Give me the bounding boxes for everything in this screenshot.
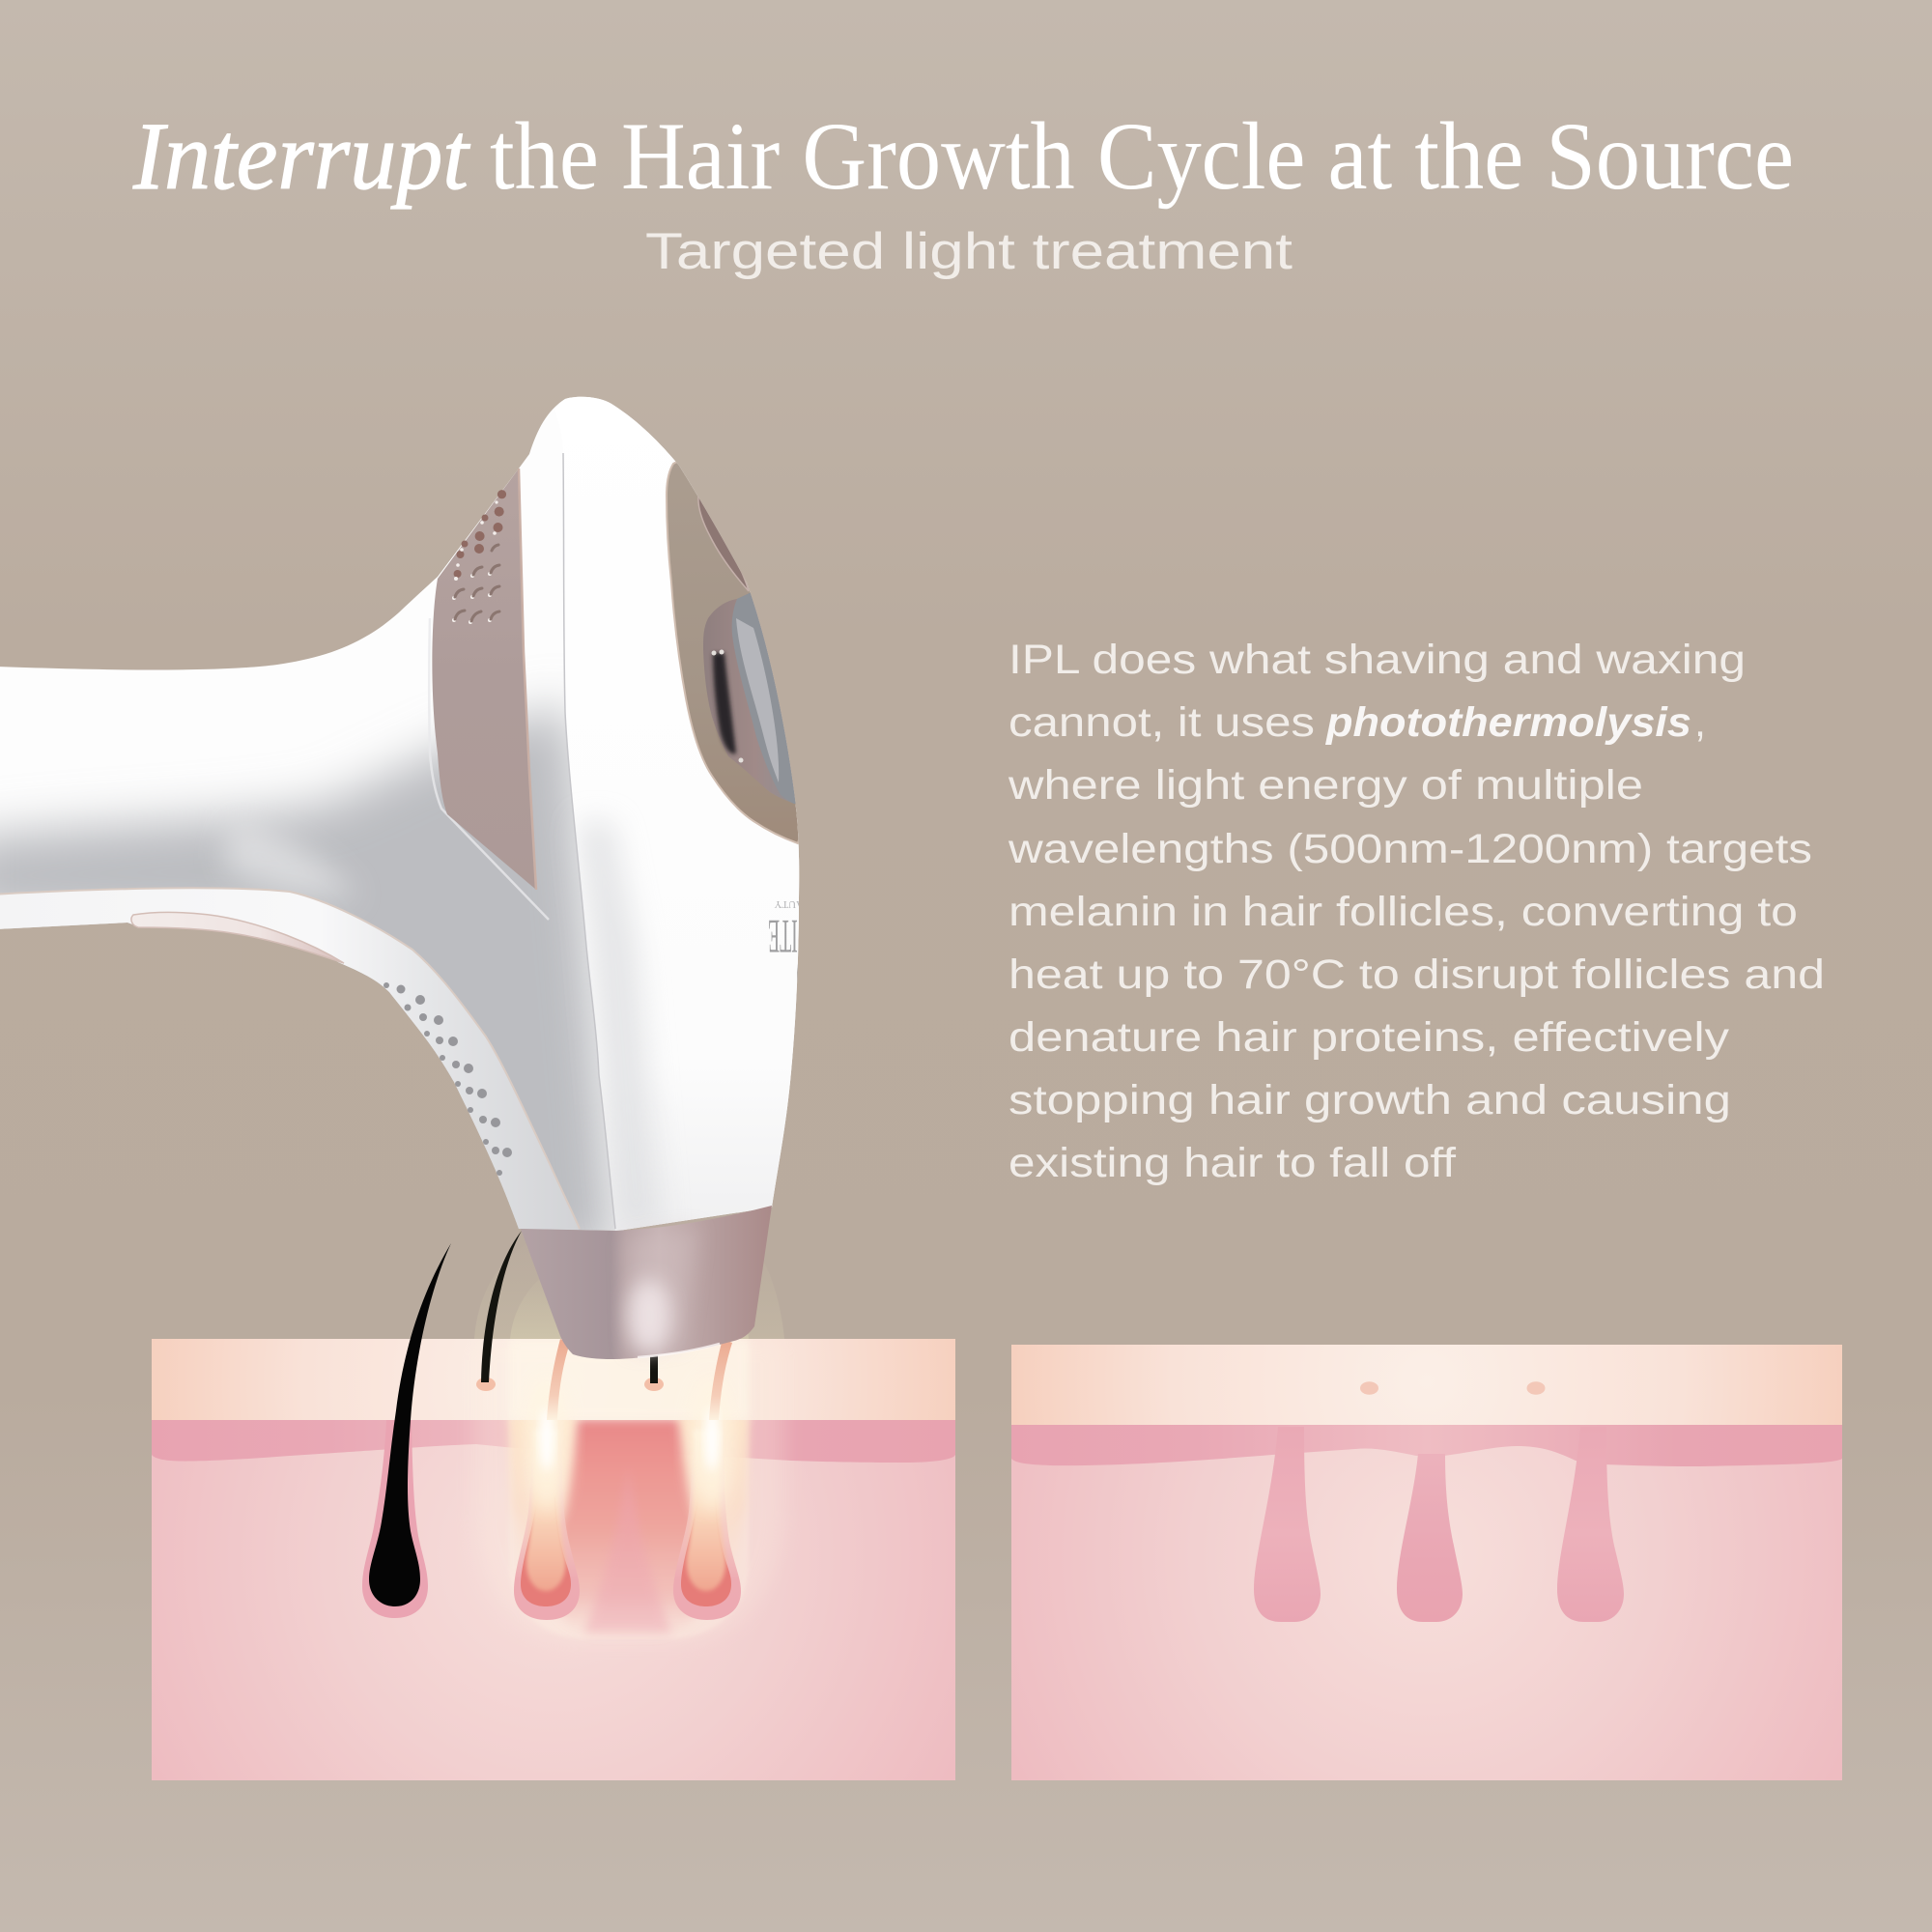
- logo text: O: [796, 948, 806, 1008]
- follicle: untreated: [362, 1420, 428, 1618]
- light glow in skin: [473, 1339, 784, 1642]
- title: the Hair Growth Cycle at the Source: [490, 102, 1794, 210]
- dark strip: [713, 653, 736, 753]
- emphasised term: photothermolysis: [1325, 699, 1691, 746]
- bulb: right heated: [681, 1430, 731, 1606]
- body text: IPL explanation: IPL does what shaving and waxing: [1009, 637, 1746, 683]
- lens crescent: [698, 496, 749, 591]
- dermis band: [1011, 1425, 1842, 1466]
- flank glow right: [680, 1420, 752, 1536]
- seam lines: [0, 888, 580, 1229]
- hair: long black: [369, 1243, 451, 1606]
- follicle 3: [1557, 1427, 1624, 1622]
- pore dots: [476, 1378, 664, 1391]
- trigger button: [131, 912, 344, 963]
- body text: IPL explanation: melanin in hair follicles, converting to: [1009, 889, 1798, 935]
- rose-gold collar: [521, 1206, 772, 1359]
- hair shaft: heated left: [547, 1339, 570, 1420]
- body text: IPL explanation: wavelengths (500nm-1200nm) targets: [1008, 826, 1812, 872]
- flank glow left: [507, 1420, 574, 1538]
- title: Interrupt: [132, 102, 470, 210]
- body text: IPL explanation: where light energy of multiple: [1008, 762, 1643, 809]
- follicle: treated left: [514, 1420, 580, 1620]
- body text: IPL explanation: denature hair proteins, effectively: [1009, 1014, 1730, 1061]
- device: IPL handset: [0, 386, 821, 1359]
- light glow above skin: [474, 1236, 784, 1339]
- subtitle: Targeted light treatment: [645, 223, 1293, 280]
- glass grey face: [732, 593, 796, 804]
- logo text: AUTY: [774, 898, 804, 910]
- hair: short left: [481, 1231, 522, 1382]
- body text: IPL explanation: [1008, 637, 1825, 1186]
- panel: skin during treatment: [152, 1243, 955, 1780]
- body shading: [0, 705, 618, 1256]
- hair shaft: heated right: [709, 1339, 732, 1420]
- body text: IPL explanation: existing hair to fall off: [1009, 1140, 1457, 1186]
- bulb: left heated: [521, 1430, 571, 1606]
- hot spots: [523, 1412, 736, 1513]
- follicle: treated right: [673, 1420, 741, 1620]
- glass: [703, 593, 796, 804]
- front face shading near ridge: [578, 821, 662, 1231]
- follicle 2: [1397, 1454, 1463, 1622]
- lower vent dots: [384, 982, 512, 1176]
- dermis band: [152, 1420, 955, 1463]
- panel: skin after treatment: [1011, 1345, 1842, 1780]
- lower strip below seam: [0, 888, 580, 1236]
- hair: short centre: [650, 1343, 658, 1383]
- window bezel: [667, 454, 807, 843]
- neck lightening near seam: [222, 821, 357, 898]
- logo text: ELITE: [768, 909, 821, 962]
- follicle 1: [1254, 1427, 1321, 1622]
- logo text: [769, 901, 799, 982]
- front face: [554, 386, 802, 1231]
- top vent panel: [432, 469, 536, 890]
- body text: IPL explanation: ,: [1694, 699, 1706, 746]
- body text: IPL explanation: heat up to 70°C to disrupt follicles and: [1009, 952, 1825, 998]
- body text: IPL explanation: stopping hair growth and causing: [1009, 1077, 1731, 1123]
- body text: IPL explanation: cannot, it uses: [1009, 699, 1315, 746]
- heated dermis between follicles: [509, 1415, 749, 1639]
- empty pores: [1360, 1381, 1546, 1395]
